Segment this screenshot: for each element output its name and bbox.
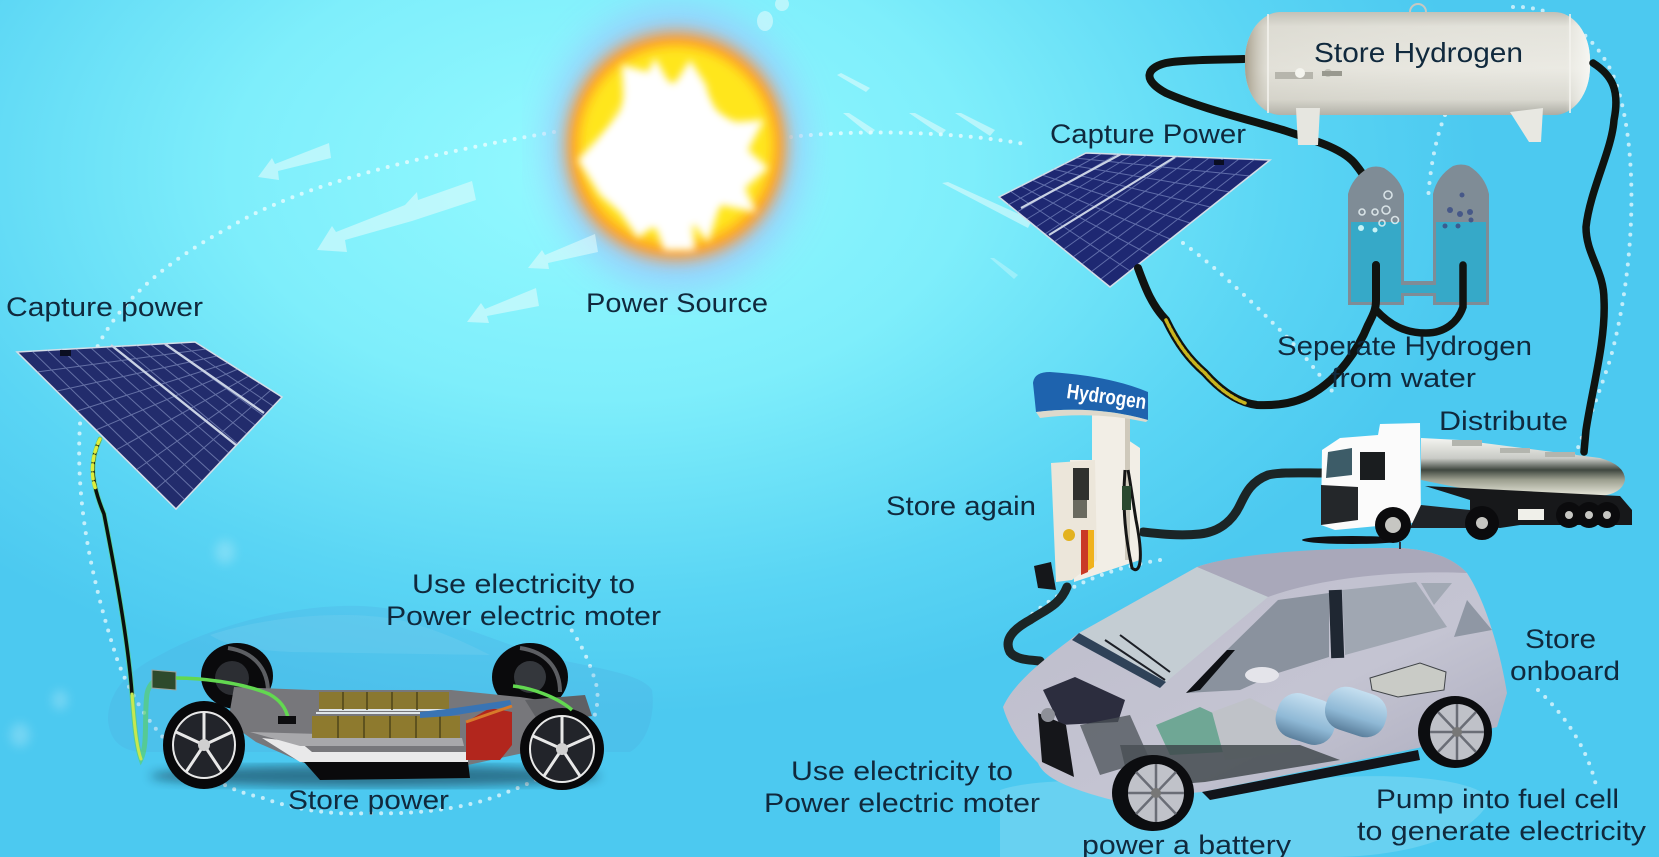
label: separate hydrogen: Seperate Hydrogen — [1277, 331, 1532, 361]
label: use electricity right: Power electric moter — [764, 788, 1040, 818]
label: store onboard — [1510, 624, 1620, 686]
car: hydrogen fuel cell vehicle cutaway — [1003, 542, 1507, 831]
icon: sun — [548, 7, 804, 287]
underfloor components — [1120, 745, 1340, 788]
engine bay — [1043, 677, 1125, 725]
tanker barrel — [1421, 438, 1625, 496]
hose: tank to truck — [1584, 63, 1616, 452]
label: separate hydrogen — [1277, 331, 1532, 393]
icon: storage tank — [1245, 4, 1590, 145]
body — [1003, 548, 1507, 800]
silver power module — [1212, 698, 1293, 760]
hose: tank to electrolyser — [1149, 59, 1368, 190]
hose: between electrolyser cells — [1376, 265, 1463, 333]
label: use electricity right — [764, 756, 1040, 818]
label: use electricity left: Power electric moter — [386, 601, 661, 631]
hose: panel to electrolyser — [1138, 265, 1376, 405]
battery box — [1370, 663, 1446, 697]
wheels — [1375, 502, 1620, 543]
front-left tyre — [163, 701, 245, 789]
hydrogen sign: Hydrogen — [1065, 380, 1148, 414]
car reflection — [1000, 776, 1490, 857]
antenna — [1399, 542, 1401, 549]
hydrogen sign — [1033, 372, 1148, 422]
cable: left panel to plug — [93, 439, 153, 759]
skirt — [1202, 750, 1420, 800]
heading: power source label: Power Source — [586, 288, 768, 318]
label: pump into fuel cell — [1357, 784, 1647, 846]
rear wheel — [1418, 696, 1492, 768]
hydrogen tanks — [1270, 681, 1392, 750]
label: pump into fuel cell: Pump into fuel cell — [1376, 784, 1619, 814]
plug — [152, 670, 176, 690]
icon: tanker truck — [1302, 423, 1632, 544]
label: store onboard: Store — [1525, 624, 1596, 654]
label: store onboard: onboard — [1510, 656, 1620, 686]
chassis frame — [228, 687, 585, 765]
label: use electricity right: Use electricity to — [791, 756, 1013, 786]
front wheel — [1112, 755, 1194, 831]
label: use electricity left: Use electricity to — [412, 569, 635, 599]
decorative light blobs — [10, 540, 235, 747]
chassis: electric car battery platform — [150, 643, 604, 790]
front-right tyre — [520, 708, 604, 790]
label: store power: Store power — [288, 785, 449, 815]
label: store again: Store again — [886, 491, 1036, 521]
label: capture power left: Capture power — [6, 292, 203, 322]
label: separate hydrogen: from water — [1331, 363, 1476, 393]
roof highlight — [1197, 548, 1467, 597]
ghost car behind chassis — [108, 606, 653, 752]
panel: left solar panel — [17, 342, 282, 509]
label: store hydrogen: Store Hydrogen — [1314, 37, 1523, 68]
hose: truck to pump — [1143, 473, 1325, 535]
grille — [1038, 713, 1074, 777]
icon: hydrogen fuel pump — [1033, 372, 1148, 590]
sun rays and arrows — [258, 0, 1032, 323]
hose: pump to car — [1008, 587, 1067, 661]
motor and red drive unit — [420, 695, 592, 760]
side windows — [1186, 593, 1329, 693]
windshield — [1079, 567, 1268, 682]
rear wheels — [201, 643, 568, 711]
label: distribute: Distribute — [1439, 406, 1568, 436]
label: capture power right: Capture Power — [1050, 119, 1246, 149]
label: use electricity left — [386, 569, 661, 631]
battery modules — [312, 692, 460, 738]
green charge lines — [176, 678, 572, 718]
cab — [1321, 423, 1421, 530]
electrolyser water cells — [1348, 164, 1489, 305]
side mirror — [1245, 667, 1279, 683]
panel: right solar panel — [999, 153, 1270, 287]
green circuit board — [1156, 707, 1232, 755]
label: pump into fuel cell: to generate electricity — [1357, 816, 1647, 846]
